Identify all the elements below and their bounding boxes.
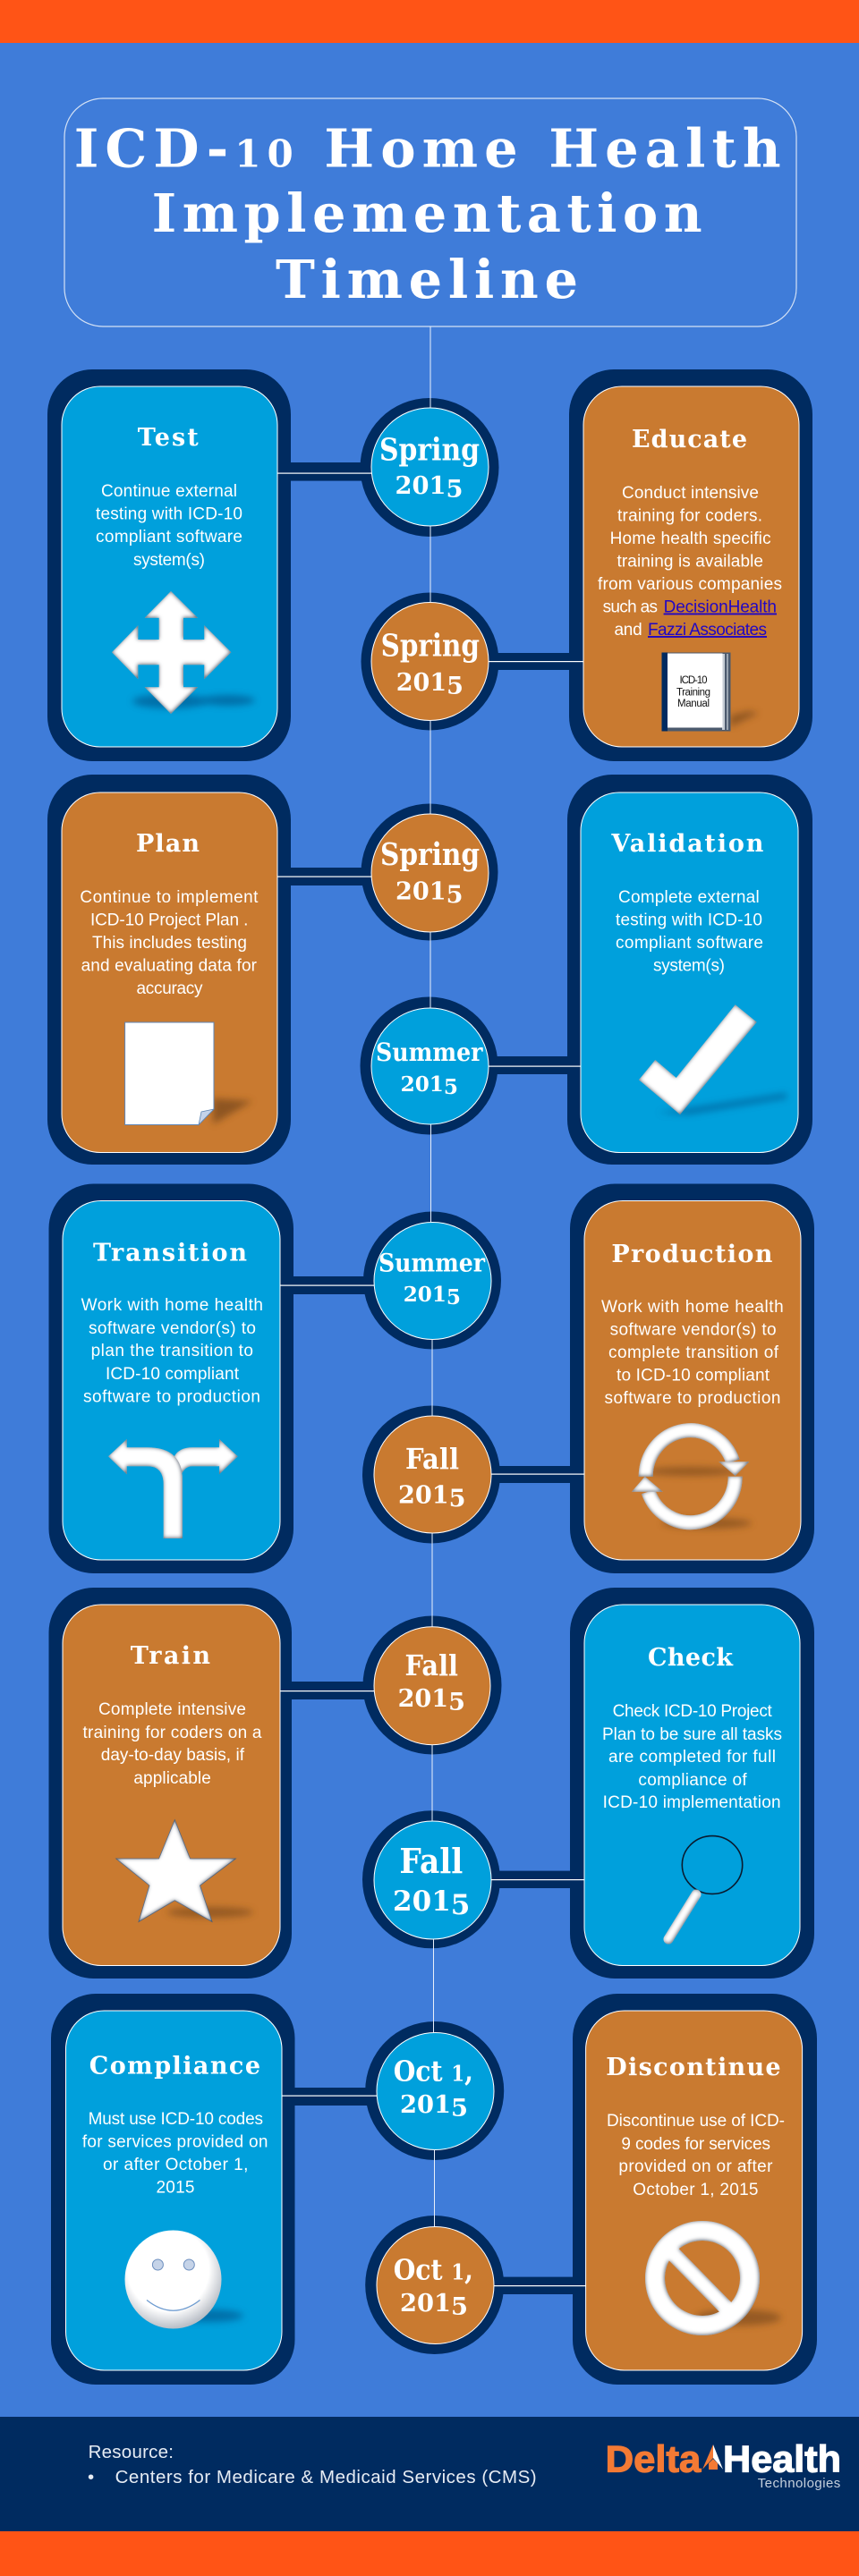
date circle: Summer 2015: 201 — [404, 1282, 447, 1307]
date circle: Summer 2015: 5 — [444, 1074, 458, 1099]
body text: 2015 — [156, 2179, 195, 2197]
body text — [607, 2112, 785, 2199]
panel: Train — [48, 1588, 292, 1979]
body text — [601, 1298, 784, 1408]
connector: Check to Fall 2015 — [491, 1871, 584, 1888]
body text: Home health specific — [610, 530, 771, 548]
heading: Educate: Educate — [632, 426, 747, 453]
body text: provided on or after — [618, 2157, 773, 2176]
body text: or after October 1, — [103, 2156, 248, 2174]
date circle: Fall 2015: 5 — [451, 1889, 470, 1921]
body text: ICD-10 implementation — [603, 1793, 781, 1812]
connector: Validation to Summer 2015 — [489, 1056, 581, 1074]
body text: system(s) — [133, 551, 205, 570]
date circle: Oct 1, 2015: 5 — [451, 2293, 468, 2321]
resource text: Centers for Medicare & Medicaid Services (CMS) — [115, 2467, 537, 2487]
connector: Educate to Spring 2015 — [489, 653, 583, 670]
date circle: Fall 2015: Fall — [405, 1443, 459, 1476]
card background — [48, 1184, 293, 1573]
body text: Conduct intensive — [622, 484, 759, 503]
heading: Plan: Plan — [136, 830, 200, 858]
connector: Train to Fall 2015 — [280, 1682, 374, 1699]
body text: training is available — [617, 553, 763, 571]
body text — [616, 888, 763, 975]
panel: Discontinue — [573, 1994, 817, 2385]
body text: software vendor(s) to — [610, 1320, 777, 1340]
icon: training manual book: ICD-10 — [680, 675, 707, 686]
icon: four-way arrows — [112, 591, 255, 714]
date circle: Fall 2015: 201 — [393, 1885, 451, 1918]
date circle: Oct 1, 2015 — [365, 2021, 504, 2160]
icon: magnifying glass — [668, 1836, 743, 1939]
icon: prohibited sign — [645, 2221, 781, 2335]
body text: Plan to be sure all tasks — [602, 1725, 782, 1744]
body text: Work with home health — [81, 1296, 263, 1315]
body text: for services provided on — [82, 2132, 268, 2152]
date circle: Spring 2015: 5 — [446, 476, 464, 504]
resource text: • — [88, 2467, 94, 2487]
card background — [47, 775, 291, 1165]
date circle: Spring 2015: 5 — [447, 673, 464, 700]
date circle: Summer 2015 — [360, 996, 498, 1134]
connector: Test to Spring 2015 — [277, 462, 371, 481]
body text: Complete external — [618, 888, 760, 907]
connector: Discontinue to Oct 1, 2015 — [494, 2277, 586, 2294]
connector: Production to Fall 2015 — [491, 1466, 584, 1483]
body text: compliant software — [616, 934, 763, 953]
date circle: Spring 2015 — [361, 803, 498, 941]
card background — [573, 1994, 817, 2385]
date circle: Fall 2015: 5 — [449, 1486, 465, 1513]
icon: blank page — [125, 1022, 252, 1125]
body text: compliance of — [638, 1771, 747, 1790]
heading: Check: Check — [648, 1644, 734, 1672]
icon: training manual book: Training — [676, 687, 710, 698]
logo: Delta Health Technologies — [606, 2437, 841, 2491]
body text: applicable — [133, 1769, 211, 1788]
date circle: Spring 2015: 5 — [447, 882, 464, 909]
resource text — [88, 2442, 537, 2487]
logo: Delta Health Technologies: Technologies — [758, 2476, 840, 2491]
date circle: Oct 1, 2015: 5 — [451, 2095, 468, 2123]
icon: branching arrow — [108, 1439, 238, 1538]
logo: Delta Health Technologies: Delta — [606, 2437, 702, 2479]
body text: such as — [603, 597, 658, 617]
body text: This includes testing — [92, 934, 247, 953]
body text: compliant software — [96, 528, 242, 547]
panel: Educate — [569, 369, 812, 761]
top orange band — [0, 0, 859, 43]
date circle: Fall 2015 — [362, 1406, 500, 1544]
heading: Train: Train — [131, 1642, 210, 1670]
body text: and — [614, 621, 642, 640]
card background — [569, 369, 812, 761]
title box: Implementation — [152, 182, 702, 244]
date circle: Spring 2015: 201 — [396, 669, 447, 697]
date circle: Fall 2015: Fall — [399, 1841, 463, 1881]
body text: day-to-day basis, if — [101, 1746, 245, 1765]
date circle: Fall 2015: 201 — [398, 1685, 448, 1713]
title box — [64, 98, 796, 326]
heading: Validation: Validation — [610, 830, 764, 858]
date circle: Summer 2015: 5 — [447, 1284, 461, 1309]
body text: testing with ICD-10 — [96, 505, 242, 524]
panel: Transition — [48, 1184, 293, 1573]
date circle: Oct 1, 2015: Oct 1, — [394, 2054, 473, 2088]
title box: Timeline — [276, 249, 578, 310]
body text: ICD-10 compliant — [106, 1365, 240, 1384]
body text — [598, 484, 782, 640]
heading: Discontinue: Discontinue — [606, 2054, 781, 2081]
logo: Delta Health Technologies: Health — [723, 2437, 841, 2479]
icon: training manual book: Manual — [677, 699, 710, 709]
date circle: Summer 2015: 201 — [401, 1072, 445, 1097]
body text: ICD-10 Project Plan . — [90, 911, 248, 930]
panel: Plan — [47, 775, 291, 1165]
body text: Work with home health — [601, 1298, 784, 1317]
card background — [51, 1994, 295, 2385]
date circle: Spring 2015: 201 — [395, 472, 446, 500]
title box: ICD-10 Home Health — [74, 118, 781, 179]
date circle: Fall 2015 — [362, 1810, 500, 1948]
body text: testing with ICD-10 — [616, 911, 762, 930]
body text: DecisionHealth — [664, 597, 777, 617]
panel: Check — [570, 1588, 814, 1979]
date circle: Spring 2015: Spring — [380, 836, 480, 873]
icon: cycle arrows — [632, 1430, 752, 1529]
heading: Compliance: Compliance — [89, 2053, 260, 2080]
body text: software to production — [83, 1388, 260, 1406]
icon: training manual book — [662, 653, 759, 732]
card background — [567, 775, 812, 1165]
body text: are completed for full — [608, 1748, 776, 1767]
body text: training for coders. — [617, 506, 762, 526]
body text — [82, 2110, 268, 2197]
footer band — [0, 2417, 859, 2531]
date circle: Spring 2015: Spring — [379, 431, 480, 469]
heading: Transition: Transition — [93, 1240, 247, 1267]
body text: and evaluating data for — [81, 957, 258, 975]
date circle: Oct 1, 2015 — [365, 2216, 504, 2354]
date circle: Oct 1, 2015: Oct 1, — [394, 2252, 473, 2286]
connector: Transition to Summer 2015 — [280, 1276, 374, 1294]
panel: Validation — [567, 775, 812, 1165]
icon: smiley face — [125, 2231, 243, 2329]
connector: Compliance to Oct 1, 2015 — [282, 2088, 377, 2106]
body text: Continue to implement — [80, 888, 259, 907]
date circle: Fall 2015: Fall — [404, 1649, 458, 1682]
body text: system(s) — [653, 957, 725, 975]
panel: Test — [47, 369, 291, 761]
date circle: Spring 2015 — [361, 592, 499, 730]
date circle: Fall 2015: 5 — [448, 1689, 465, 1716]
icon: star — [116, 1820, 253, 1921]
body text — [82, 1700, 262, 1788]
body text: Fazzi Associates — [648, 621, 767, 640]
bottom orange band — [0, 2531, 859, 2576]
date circle: Fall 2015 — [363, 1615, 501, 1755]
timeline spine — [430, 326, 435, 2226]
heading: Production: Production — [611, 1241, 773, 1268]
body text — [81, 1296, 263, 1406]
date circle: Oct 1, 2015: 201 — [400, 2290, 450, 2318]
date circle: Summer 2015 — [363, 1211, 501, 1349]
date circle: Spring 2015 — [360, 398, 499, 537]
date circle: Oct 1, 2015: 201 — [400, 2091, 450, 2119]
date circle: Spring 2015: 201 — [395, 878, 446, 905]
body text: 9 codes for services — [621, 2135, 770, 2154]
body text: October 1, 2015 — [633, 2181, 759, 2199]
body text: plan the transition to — [91, 1342, 253, 1360]
date circle: Summer 2015: Summer — [376, 1038, 484, 1067]
body text: Continue external — [101, 482, 237, 501]
body text — [602, 1702, 782, 1812]
body text: from various companies — [598, 575, 782, 594]
body text: software to production — [605, 1389, 780, 1408]
body text: training for coders on a — [82, 1724, 262, 1742]
date circle: Summer 2015: Summer — [378, 1249, 486, 1278]
date circle: Fall 2015: 201 — [398, 1482, 448, 1510]
card background — [47, 369, 291, 761]
body text: software vendor(s) to — [89, 1319, 256, 1338]
panel: Production — [570, 1184, 814, 1573]
body text — [96, 482, 242, 570]
body text: to ICD-10 compliant — [617, 1367, 770, 1385]
panel: Compliance — [51, 1994, 295, 2385]
body text: complete transition of — [608, 1343, 779, 1362]
body text — [80, 888, 259, 998]
body text: Must use ICD-10 codes — [89, 2110, 263, 2129]
body text: Complete intensive — [98, 1700, 246, 1719]
connector: Plan to Spring 2015 — [277, 868, 371, 886]
card background — [570, 1588, 814, 1979]
resource text: Resource: — [89, 2442, 174, 2462]
body text: accuracy — [136, 979, 203, 998]
card background — [570, 1184, 814, 1573]
heading: Test: Test — [138, 424, 199, 452]
body text: Discontinue use of ICD- — [607, 2112, 785, 2131]
icon: check mark — [639, 1004, 787, 1114]
card background — [48, 1588, 292, 1979]
date circle: Spring 2015: Spring — [381, 627, 480, 664]
body text: Check ICD-10 Project — [613, 1702, 773, 1721]
